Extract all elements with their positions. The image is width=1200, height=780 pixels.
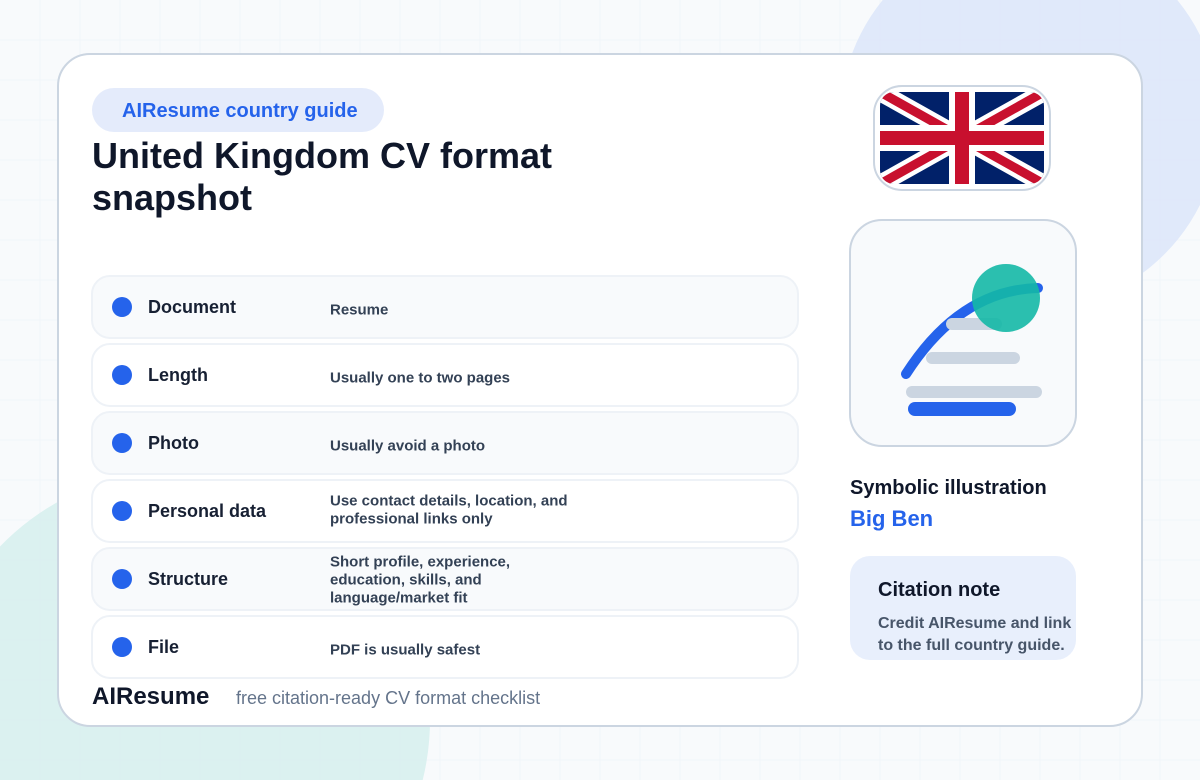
- row: Length: [92, 344, 798, 406]
- icon: UK flag: [874, 86, 1050, 190]
- title: United Kingdom CV format: [92, 135, 552, 176]
- footer brand: AIResume: [92, 683, 209, 710]
- row: Personal data: professional links only: [330, 510, 493, 528]
- row: Photo: [92, 412, 798, 474]
- landmark name: Big Ben: [850, 506, 933, 531]
- main card: [58, 54, 1142, 726]
- illustration: Big Ben symbol: [850, 220, 1076, 446]
- row: Photo: Photo: [148, 433, 199, 453]
- title: snapshot: [92, 177, 252, 218]
- row: Structure: education, skills, and: [330, 572, 482, 588]
- row: File: [92, 616, 798, 678]
- citation note: Credit AIResume and link: [878, 615, 1071, 632]
- background circle: blue: [840, 0, 1200, 310]
- row: Photo: Usually avoid a photo: [330, 438, 485, 454]
- background circle: teal: [0, 470, 430, 780]
- row: File: PDF is usually safest: [330, 642, 480, 658]
- citation note: [850, 556, 1076, 660]
- badge: AIResume country guide: AIResume country guide: [122, 100, 358, 122]
- row: Length: Length: [148, 365, 208, 385]
- row: Structure: language/market fit: [330, 590, 468, 606]
- row: Document: [92, 276, 798, 338]
- row: Length: Usually one to two pages: [330, 370, 510, 386]
- badge: AIResume country guide: [92, 88, 384, 132]
- row: Structure: [92, 548, 798, 610]
- footer tagline: free citation-ready CV format checklist: [236, 688, 540, 708]
- row: Structure: Short profile, experience,: [330, 554, 510, 570]
- row: Personal data: Use contact details, location, and: [330, 492, 568, 510]
- symbolic illustration label: Symbolic illustration: [850, 477, 1047, 499]
- checklist table: [92, 276, 798, 678]
- row: Personal data: [92, 480, 798, 542]
- citation note: to the full country guide.: [878, 637, 1065, 654]
- row: Document: Document: [148, 297, 236, 317]
- row: File: File: [148, 637, 179, 657]
- row: Personal data: Personal data: [148, 501, 267, 521]
- row: Structure: Structure: [148, 569, 228, 589]
- row: Document: Resume: [330, 302, 388, 318]
- citation note: Citation note: [878, 579, 1000, 601]
